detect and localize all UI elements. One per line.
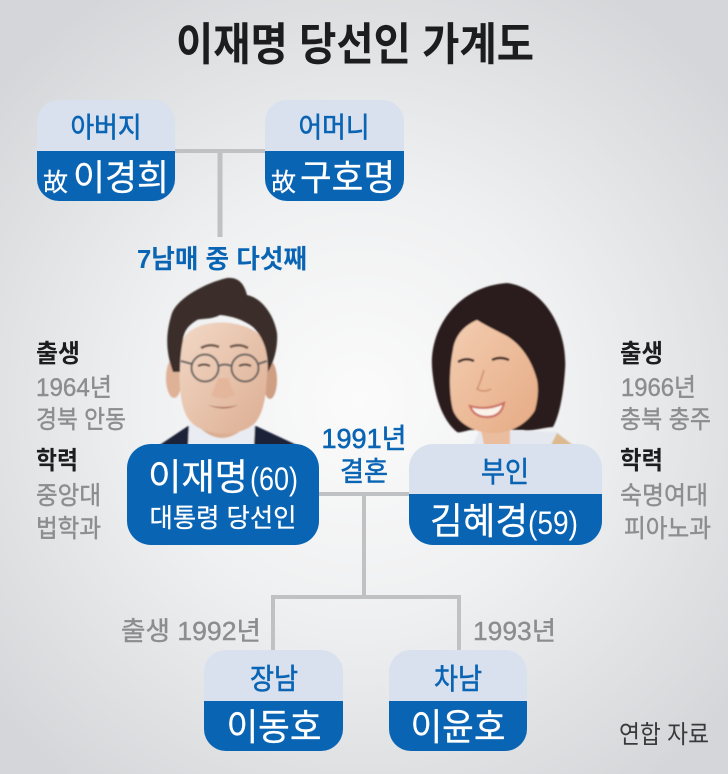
card: first son: 장남 [250, 664, 298, 696]
profile: president-elect: 경북 안동 [36, 406, 126, 434]
profile: wife: 피아노과 [624, 515, 711, 543]
card: second son: 차남 [434, 664, 482, 696]
card: second son: 이윤호 [410, 707, 506, 748]
card: father [37, 100, 175, 201]
portrait: president-elect [158, 278, 299, 446]
card: president-elect: 대통령 당선인 [150, 503, 296, 533]
profile: wife [620, 340, 711, 543]
portrait: wife [432, 283, 573, 445]
card: second son [389, 650, 527, 751]
sibling note: 7남매 중 다섯째 [137, 244, 307, 274]
card: wife: 김혜경 [430, 501, 528, 542]
card: wife [409, 444, 602, 545]
source credit: 연합 자료 [619, 721, 709, 749]
marriage note [322, 423, 406, 487]
marriage note: 결혼 [340, 457, 388, 487]
card: president-elect: 이재명 [148, 457, 248, 498]
card: mother: 구호명 [300, 157, 395, 198]
profile: wife: 충북 충주 [620, 406, 711, 434]
profile: president-elect: 법학과 [36, 515, 101, 543]
card: mother: 故 [271, 169, 296, 197]
profile: president-elect: 출생 [36, 340, 80, 368]
marriage note: 1991년 [322, 423, 406, 454]
card: father: 故 [43, 169, 68, 197]
profile: president-elect [36, 340, 126, 543]
profile: president-elect: 1964년 [36, 374, 112, 402]
connector: couple to children [271, 492, 461, 651]
card: wife: (59) [528, 505, 578, 541]
card: president-elect: (60) [250, 461, 298, 497]
title: 이재명 당선인 가계도 [176, 19, 534, 70]
profile: president-elect: 학력 [36, 447, 78, 475]
card: mother: 어머니 [298, 112, 370, 143]
card: mother [265, 100, 404, 201]
profile: wife: 숙명여대 [620, 482, 708, 510]
card: father: 이경희 [73, 157, 169, 198]
connector: parents to president [175, 149, 265, 237]
card: wife: 부인 [481, 457, 529, 489]
card: first son: 이동호 [226, 707, 322, 748]
profile: president-elect: 중앙대 [36, 482, 101, 510]
profile: wife: 출생 [620, 340, 663, 368]
profile: wife: 학력 [620, 447, 663, 475]
birth year: second son: 1993년 [473, 616, 556, 646]
card: first son [204, 650, 343, 751]
birth year: first son: 출생 1992년 [121, 616, 261, 646]
card: father: 아버지 [70, 112, 142, 143]
card: president-elect [127, 444, 319, 545]
profile: wife: 1966년 [621, 374, 696, 402]
